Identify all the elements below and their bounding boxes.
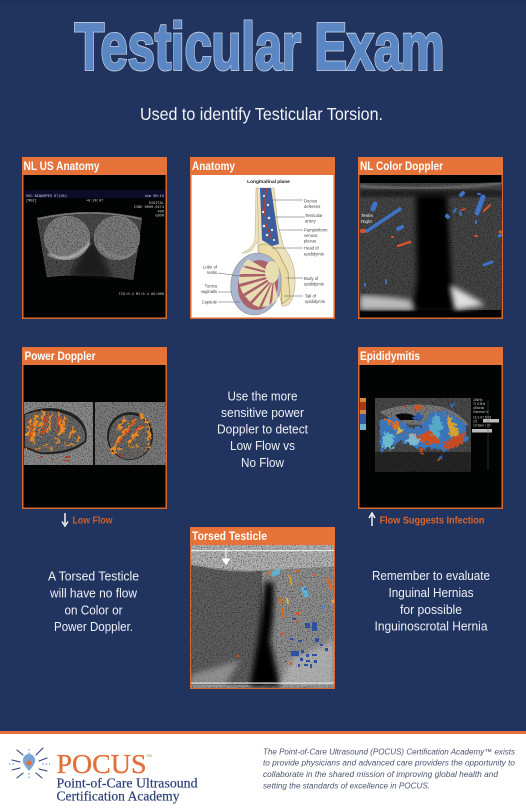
anatomy diagram: venous (304, 233, 318, 238)
left note: torsed testicle: will have no flow (49, 586, 138, 600)
anatomy diagram: testis (207, 270, 217, 275)
panel heading: Epididymitis: Epididymitis (360, 349, 420, 363)
logo: POCUS (56, 749, 146, 779)
anatomy diagram: epididymis (304, 282, 324, 286)
subtitle: Used to identify Testicular Torsion. (140, 104, 383, 124)
anatomy diagram: plexus (304, 238, 316, 244)
panel heading: NL Color Doppler (358, 157, 503, 175)
epididymitis doppler image: General /V (473, 410, 490, 414)
low flow note (62, 513, 113, 526)
torsed testicle doppler image (191, 545, 334, 688)
ultrasound image: DIGITAL (149, 202, 164, 206)
infection note: Flow Suggests Infection (380, 516, 484, 526)
panel heading: NL Color Doppler: NL Color Doppler (360, 159, 443, 173)
mission statement: The Point-of-Care Ultrasound (POCUS) Certification Academy™ exists (263, 748, 515, 756)
panel: Epididymitis (358, 347, 503, 508)
epididymitis doppler image (360, 398, 499, 472)
panel heading: NL US Anatomy (22, 157, 167, 175)
ultrasound image: GSOR (155, 214, 165, 218)
panel: Anatomy (190, 157, 335, 319)
center note: power doppler (217, 388, 308, 470)
anatomy diagram: Longitudinal plane (247, 179, 290, 185)
icon: up arrow (369, 513, 375, 526)
center note: power doppler: sensitive power (221, 405, 305, 420)
anatomy diagram: epididymis (304, 252, 324, 256)
left note: torsed testicle: on Color or (64, 602, 123, 618)
ultrasound image: CINE 0000-0274 (134, 206, 164, 210)
panel heading: Anatomy (190, 157, 335, 175)
logo: Certification Academy (56, 788, 180, 804)
panel heading: Power Doppler (22, 347, 167, 365)
anatomy diagram: vaginalis (201, 289, 217, 294)
anatomy diagram: Testicular (305, 213, 323, 218)
panel: NL Color Doppler (358, 157, 503, 318)
right note: hernias: for possible (400, 602, 462, 617)
power doppler image (24, 402, 166, 465)
ultrasound image (25, 190, 165, 297)
footer (0, 731, 526, 812)
right note: hernias: Inguinoscrotal Hernia (374, 618, 488, 634)
panel: Torsed Testicle (190, 527, 335, 688)
panel: Power Doppler (22, 347, 167, 508)
ultrasound image: [MB2] (26, 198, 37, 204)
ultrasound image: +0:20:07 (86, 200, 103, 204)
center note: power doppler: Low Flow vs (230, 438, 295, 453)
panel heading: Epididymitis (358, 347, 503, 365)
epididymitis doppler image: 2/1 (473, 420, 478, 424)
center note: power doppler: Doppler to detect (217, 422, 308, 436)
anatomy diagram: artery (305, 218, 317, 224)
anatomy diagram: Head of (304, 246, 320, 250)
anatomy diagram: Capsule (202, 300, 218, 304)
center note: power doppler: No Flow (241, 455, 285, 470)
epididymitis doppler image: 11/1-07 6/13 (473, 416, 491, 420)
anatomy diagram: epididymis (305, 299, 325, 304)
ultrasound image: 400 (158, 210, 164, 214)
infection note (369, 513, 484, 526)
logo (9, 748, 198, 804)
label: testis right (361, 213, 373, 224)
label: testis right: Right (361, 219, 372, 224)
center note: power doppler: Use the more (228, 388, 298, 404)
left note: torsed testicle (48, 568, 139, 634)
icon: down arrow (62, 513, 68, 526)
logo: TM (146, 753, 152, 758)
logo: Point-of-Care Ultrasound (56, 776, 198, 790)
anatomy diagram: Ductus (304, 198, 317, 204)
right note: hernias: Inguinal Hernias (388, 585, 474, 600)
color doppler image (360, 183, 502, 312)
panel heading: Torsed Testicle: Torsed Testicle (192, 529, 267, 543)
mission statement: collaborate in the shared mission of improving global health and (263, 770, 499, 779)
anatomy diagram: Lobe of (203, 264, 218, 270)
epididymitis doppler image: 155Hz (473, 398, 483, 402)
anatomy diagram (201, 179, 328, 319)
anatomy diagram: Body of (304, 276, 319, 281)
label: testis right: Testis (361, 213, 373, 218)
panel: NL US Anatomy (22, 157, 167, 318)
left note: torsed testicle: A Torsed Testicle (48, 568, 139, 584)
panel heading: Power Doppler: Power Doppler (24, 349, 96, 363)
anatomy diagram: deferens (304, 204, 320, 209)
ultrasound image: 4cm 00:15 (145, 195, 164, 199)
anatomy diagram: Pampiniform (304, 228, 328, 232)
epididymitis doppler image: 10 6am / 30 (473, 424, 491, 428)
anatomy diagram: Tail of (305, 294, 317, 298)
epididymitis doppler image: TI 0.9Hz (473, 402, 486, 406)
right note: hernias (372, 568, 490, 634)
mission statement (263, 748, 516, 790)
ultrasound image: VOC BIWASPES 07(06) (26, 194, 67, 199)
left note: torsed testicle: Power Doppler. (54, 619, 133, 634)
right note: hernias: Remember to evaluate (372, 568, 490, 583)
panel heading: NL US Anatomy: NL US Anatomy (24, 159, 100, 173)
icon: location pin with rays (9, 748, 50, 780)
panel heading: Torsed Testicle (190, 527, 335, 545)
mission statement: to provide physicians and advanced care providers the opportunity to (263, 758, 516, 768)
anatomy diagram: Tunica (205, 284, 218, 288)
mission statement: setting the standards of excellence in POCUS. (263, 782, 430, 790)
low flow note: Low Flow (72, 516, 113, 526)
panel heading: Anatomy: Anatomy (192, 159, 235, 173)
epididymitis doppler image: oEstrdo (473, 406, 485, 410)
ultrasound image: TIS:0.4 MI:0.4 AO:60% (119, 293, 165, 297)
